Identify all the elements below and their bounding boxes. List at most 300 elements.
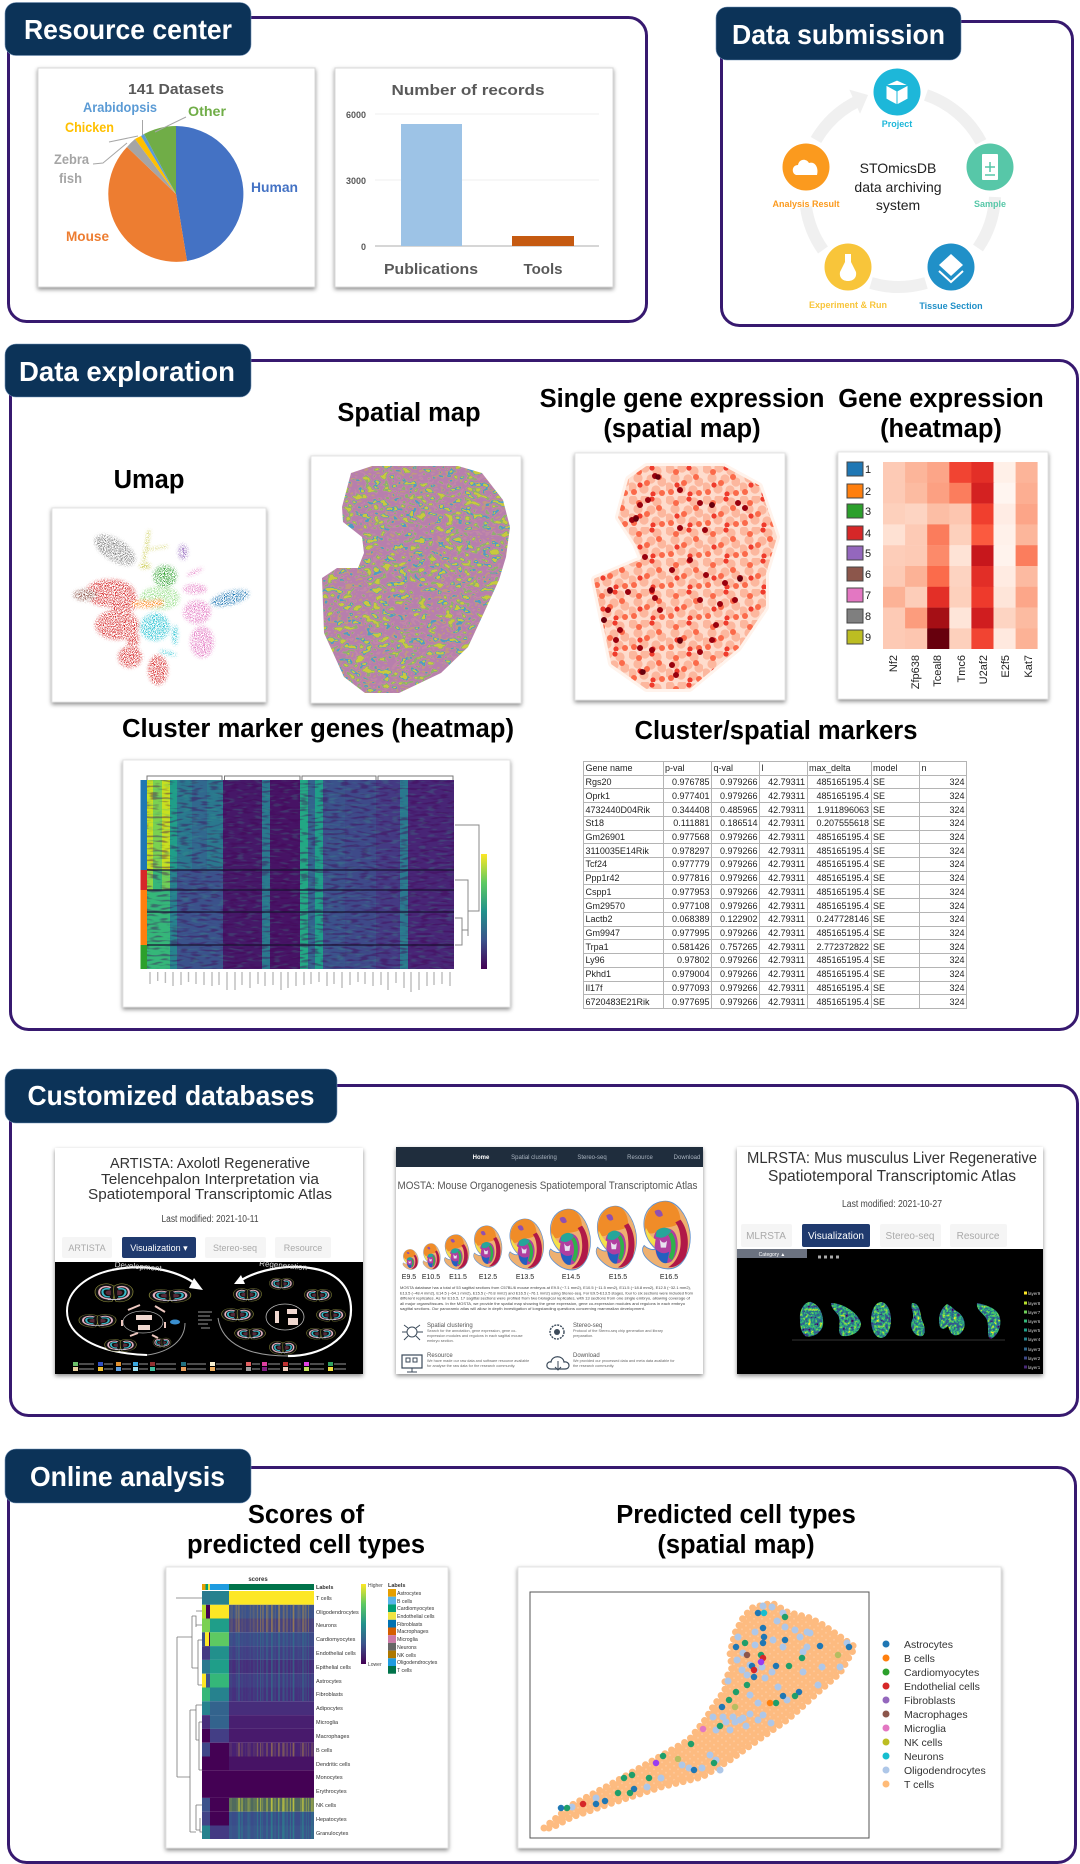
table: cluster spatial markers: SE xyxy=(873,818,885,828)
table: cluster spatial markers: 0.186514 xyxy=(720,818,758,828)
heading: customized databases: Customized databases xyxy=(28,1080,314,1111)
table: cluster spatial markers: 0.979266 xyxy=(720,777,758,787)
label legend: T cells xyxy=(397,1668,412,1674)
table: cluster spatial markers: 324 xyxy=(949,859,964,869)
table: cluster spatial markers: 324 xyxy=(949,914,964,924)
title: scores of predicted cell types: predicted cell types xyxy=(187,1531,425,1559)
umap card xyxy=(52,508,266,702)
table: cluster spatial markers: 0.581426 xyxy=(672,942,710,952)
table: cluster spatial markers: Oprk1 xyxy=(586,791,610,801)
card: ARTISTA xyxy=(55,1148,363,1374)
table: cluster spatial markers: SE xyxy=(873,859,885,869)
icon: experiment and run xyxy=(824,244,872,290)
cell type legend: T cells xyxy=(904,1779,934,1791)
single gene expression card xyxy=(575,453,785,700)
icon: analysis result xyxy=(782,144,830,190)
table: cluster spatial markers: max_delta xyxy=(809,763,851,773)
table: cluster spatial markers: 42.79311 xyxy=(768,969,805,979)
table: cluster spatial markers: SE xyxy=(873,942,885,952)
colour scale xyxy=(361,1583,383,1668)
feature: resource: We have made our raw data and software resource available xyxy=(427,1359,529,1363)
colorbar xyxy=(481,854,487,969)
table: cluster spatial markers: 0.122902 xyxy=(720,914,758,924)
table: cluster spatial markers: SE xyxy=(873,777,885,787)
bar chart card: number of records: Number of records xyxy=(392,82,544,99)
panel: resource center xyxy=(5,2,646,322)
table: cluster spatial markers: 0.979266 xyxy=(720,928,758,938)
pie chart card: 141 datasets xyxy=(38,68,315,287)
table: cluster spatial markers: SE xyxy=(873,955,885,965)
table: cluster spatial markers: 324 xyxy=(949,873,964,883)
table: cluster spatial markers: 42.79311 xyxy=(768,887,805,897)
table: cluster spatial markers: 324 xyxy=(949,942,964,952)
table: cluster spatial markers: 0.344408 xyxy=(672,805,710,815)
pie chart card: 141 datasets: Arabidopsis xyxy=(83,99,157,115)
panel: customized databases xyxy=(5,1069,1078,1416)
table: cluster spatial markers: 42.79311 xyxy=(768,818,805,828)
title: gene expression heatmap xyxy=(838,385,1044,443)
table: cluster spatial markers: 485165195.4 xyxy=(816,887,869,897)
row labels: Erythrocytes xyxy=(316,1789,347,1795)
row labels: NK cells xyxy=(316,1803,336,1809)
nav bar: Stereo-seq xyxy=(577,1155,607,1161)
heading: customized databases xyxy=(5,1069,337,1123)
embryo series: E13.5 xyxy=(516,1274,534,1281)
cell type legend: Fibroblasts xyxy=(904,1695,955,1707)
tabs: Visualization ▾ xyxy=(130,1243,188,1253)
table: cluster spatial markers: 0.979266 xyxy=(720,955,758,965)
table: cluster spatial markers: 6720483E21Rik xyxy=(586,997,650,1007)
table: cluster spatial markers: 42.79311 xyxy=(768,832,805,842)
feature: spatial clustering: expression modules and regulons in each sagittal mouse xyxy=(427,1334,523,1338)
title: predicted cell types spatial map: (spatial map) xyxy=(657,1531,815,1559)
table: cluster spatial markers: 485165195.4 xyxy=(816,846,869,856)
gene labels: Nf2 xyxy=(888,655,900,672)
feature: spatial clustering: Search for the annotation, gene expression, gene co- xyxy=(427,1329,517,1333)
table: cluster spatial markers: 324 xyxy=(949,928,964,938)
table: cluster spatial markers: 0.977695 xyxy=(672,997,710,1007)
row labels: Fibroblasts xyxy=(316,1692,343,1698)
embryo series: E11.5 xyxy=(449,1274,467,1281)
tabs: MLRSTA xyxy=(746,1231,786,1242)
table: cluster spatial markers: 0.111881 xyxy=(673,818,710,828)
title: scores of predicted cell types: Scores of xyxy=(248,1501,365,1529)
table: cluster spatial markers: 42.79311 xyxy=(768,777,805,787)
table: cluster spatial markers: Gm29570 xyxy=(586,901,625,911)
card: MOSTA xyxy=(396,1147,703,1374)
table: cluster spatial markers: SE xyxy=(873,901,885,911)
cycle labels xyxy=(772,119,1006,311)
table: cluster spatial markers: 324 xyxy=(949,983,964,993)
table: cluster spatial markers: SE xyxy=(873,983,885,993)
bar chart card: number of records: Tools xyxy=(524,261,562,278)
table: cluster spatial markers: 0.485965 xyxy=(720,805,758,815)
feature: stereo-seq: preparation. xyxy=(573,1334,593,1338)
heading: resource center xyxy=(5,2,251,56)
table: cluster spatial markers: 0.207555618 xyxy=(816,818,869,828)
row labels: Labels xyxy=(316,1585,333,1591)
table: cluster spatial markers: 2.772372822 xyxy=(816,942,869,952)
spatial layers viewer xyxy=(737,1249,1043,1374)
table: cluster spatial markers: 0.068389 xyxy=(672,914,710,924)
layer legend: layer7 xyxy=(1028,1310,1041,1315)
card: ARTISTA: ARTISTA: Axolotl Regenerative xyxy=(110,1155,310,1172)
description: all major organs/tissues. In the MOSTA, we provide the spatial map showing the gene expression, gene co-expression modules and regulons in each embryo xyxy=(400,1302,685,1306)
icon: project xyxy=(874,68,920,116)
center label: STOmicsDB xyxy=(860,160,936,176)
cardiomyocyte spots xyxy=(567,1617,802,1808)
nav bar: Home xyxy=(473,1155,490,1161)
dendrogram xyxy=(176,1598,202,1832)
table: cluster spatial markers: 0.979266 xyxy=(720,873,758,883)
feature: spatial clustering: embryo section. xyxy=(427,1339,454,1343)
layer legend: layer6 xyxy=(1028,1319,1041,1324)
bar chart card: number of records xyxy=(335,68,613,287)
table: cluster spatial markers: 3110035E14Rik xyxy=(586,846,649,856)
table: cluster spatial markers: model xyxy=(873,763,898,773)
title: scores of predicted cell types xyxy=(187,1501,425,1559)
table: cluster spatial markers: 324 xyxy=(949,846,964,856)
bar chart card: number of records: 0 xyxy=(361,242,366,252)
layer legend: layer1 xyxy=(1028,1365,1041,1370)
label legend: Macrophages xyxy=(397,1629,429,1635)
bar chart card: number of records: Publications xyxy=(384,261,478,278)
tabs xyxy=(741,1224,1007,1247)
cluster legend xyxy=(847,462,863,644)
development and regeneration figure: Development xyxy=(114,1260,163,1273)
tabs: Visualization xyxy=(808,1231,864,1242)
table: cluster spatial markers: 324 xyxy=(949,832,964,842)
embryo series: E16.5 xyxy=(660,1274,678,1281)
table: cluster spatial markers: 0.979266 xyxy=(720,832,758,842)
title: cluster marker genes: Cluster marker genes (heatmap) xyxy=(122,715,514,743)
embryo series: E15.5 xyxy=(609,1274,627,1281)
scores heatmap card xyxy=(166,1567,448,1848)
table: cluster spatial markers: 324 xyxy=(949,997,964,1007)
cell type legend: B cells xyxy=(904,1653,935,1665)
table: cluster spatial markers: Ly96 xyxy=(586,955,605,965)
gene labels: Tceal8 xyxy=(932,655,944,687)
feature: resource: for analyse the raw data for the research community. xyxy=(427,1364,515,1368)
table: cluster spatial markers: l xyxy=(762,763,764,773)
table: cluster spatial markers: 485165195.4 xyxy=(816,832,869,842)
table: cluster spatial markers: 42.79311 xyxy=(768,873,805,883)
row labels: Astrocytes xyxy=(316,1679,342,1685)
feature: spatial clustering xyxy=(402,1323,523,1343)
table: cluster spatial markers: 0.757265 xyxy=(720,942,758,952)
development and regeneration figure xyxy=(55,1259,363,1374)
card: MLRSTA: Spatiotemporal Transcriptomic Atlas xyxy=(768,1168,1016,1185)
label bar xyxy=(202,1584,314,1590)
title: umap: Umap xyxy=(114,466,184,494)
table: cluster spatial markers: Rgs20 xyxy=(586,777,612,787)
astrocyte spots xyxy=(561,1613,849,1808)
cycle ring arrows xyxy=(806,92,995,287)
table: cluster spatial markers: 42.79311 xyxy=(768,914,805,924)
tissue xyxy=(544,1603,855,1828)
feature: spatial clustering: Spatial clustering xyxy=(427,1323,473,1329)
title: gene expression heatmap: (heatmap) xyxy=(880,415,1002,443)
nav bar xyxy=(396,1147,703,1167)
row labels: Endothelial cells xyxy=(316,1651,356,1657)
pie chart card: 141 datasets: Mouse xyxy=(66,228,109,244)
nav bar: Spatial clustering xyxy=(511,1155,557,1161)
table: cluster spatial markers: 485165195.4 xyxy=(816,997,869,1007)
layer legend xyxy=(1028,1291,1041,1370)
table: cluster spatial markers: 324 xyxy=(949,777,964,787)
table: cluster spatial markers xyxy=(583,761,967,1009)
row labels: Oligodendrocytes xyxy=(316,1610,359,1616)
table: cluster spatial markers: 0.978297 xyxy=(672,846,710,856)
top brackets xyxy=(147,776,453,780)
cell type legend: Neurons xyxy=(904,1751,944,1763)
bar chart card: number of records: 6000 xyxy=(346,110,366,120)
panel: data exploration xyxy=(5,344,1078,1030)
table: cluster spatial markers: 0.979266 xyxy=(720,983,758,993)
gene expression heatmap card: 8 xyxy=(865,611,871,623)
feature: stereo-seq xyxy=(550,1323,663,1339)
row labels: Hepatocytes xyxy=(316,1817,347,1823)
table: cluster spatial markers: SE xyxy=(873,997,885,1007)
table: cluster spatial markers: Gm9947 xyxy=(586,928,620,938)
table: cluster spatial markers: 0.977401 xyxy=(672,791,710,801)
gene expression heatmap card: 1 xyxy=(865,464,871,476)
cell type legend: Oligodendrocytes xyxy=(904,1765,986,1777)
label legend xyxy=(388,1583,438,1674)
row labels: Neurons xyxy=(316,1623,337,1629)
heatmap cells xyxy=(883,462,1038,649)
cycle labels: Sample xyxy=(974,199,1006,209)
gene expression heatmap card: 2 xyxy=(865,486,871,498)
table: cluster spatial markers: 324 xyxy=(949,901,964,911)
table: cluster spatial markers: St18 xyxy=(586,818,604,828)
bar chart card: number of records: 3000 xyxy=(346,176,366,186)
feature: stereo-seq: Stereo-seq xyxy=(573,1323,602,1329)
nav bar: Download xyxy=(674,1155,700,1161)
table: cluster spatial markers: 0.977995 xyxy=(672,928,710,938)
development and regeneration figure: Regeneration xyxy=(259,1259,308,1272)
gene labels: E2f5 xyxy=(1000,655,1012,678)
table: cluster spatial markers: 1.911896063 xyxy=(817,805,869,815)
table: cluster spatial markers: Il17f xyxy=(586,983,603,993)
tabs: Resource xyxy=(957,1231,1000,1242)
pie chart card: 141 datasets: 141 Datasets xyxy=(128,81,224,98)
layer legend: layer3 xyxy=(1028,1347,1041,1352)
nav bar: Resource xyxy=(627,1155,653,1161)
table: cluster spatial markers: 485165195.4 xyxy=(816,901,869,911)
embryo series: E10.5 xyxy=(422,1274,440,1281)
predicted cell types spatial map card xyxy=(518,1567,1001,1848)
label legend: Astrocytes xyxy=(397,1591,422,1597)
table: cluster spatial markers: 485165195.4 xyxy=(816,983,869,993)
table: cluster spatial markers: 324 xyxy=(949,955,964,965)
card: ARTISTA: Telencehpalon Interpretation via xyxy=(101,1171,320,1188)
card: ARTISTA: Last modified: 2021-10-11 xyxy=(162,1214,259,1225)
oligodendrocyte spots xyxy=(572,1606,847,1807)
gene labels: Tmc6 xyxy=(956,655,968,682)
table: cluster spatial markers: p-val xyxy=(665,763,685,773)
side cluster bar xyxy=(140,780,147,969)
gene expression heatmap card: 4 xyxy=(865,528,871,540)
spatial layers viewer: Category ▲ xyxy=(759,1252,785,1258)
tabs: Stereo-seq xyxy=(213,1243,257,1253)
row labels: Adipocytes xyxy=(316,1706,343,1712)
table: cluster spatial markers: SE xyxy=(873,928,885,938)
title: predicted cell types spatial map xyxy=(616,1501,856,1559)
table: cluster spatial markers: 4732440D04Rik xyxy=(586,805,650,815)
heading: data exploration: Data exploration xyxy=(19,356,235,387)
label legend: Fibroblasts xyxy=(397,1622,423,1628)
table: cluster spatial markers: n xyxy=(922,763,927,773)
cycle labels: Experiment & Run xyxy=(809,300,887,310)
gene expression heatmap card: 3 xyxy=(865,506,871,518)
label legend: NK cells xyxy=(397,1653,416,1659)
row labels: B cells xyxy=(316,1748,332,1754)
icon: tissue section xyxy=(928,244,974,290)
pie chart card: 141 datasets: Zebra xyxy=(54,151,89,167)
colour scale: Lower xyxy=(368,1662,382,1668)
row labels: Monocytes xyxy=(316,1775,343,1781)
cell type legend: NK cells xyxy=(904,1737,943,1749)
table: cluster spatial markers: 42.79311 xyxy=(768,859,805,869)
card: MLRSTA: MLRSTA: Mus musculus Liver Regenerative xyxy=(747,1150,1037,1167)
row labels: Macrophages xyxy=(316,1734,350,1740)
table: cluster spatial markers: SE xyxy=(873,969,885,979)
panel: data submission xyxy=(716,7,1072,326)
table: cluster spatial markers: SE xyxy=(873,887,885,897)
tabs: Stereo-seq xyxy=(886,1231,934,1242)
layer legend: layer9 xyxy=(1028,1291,1041,1296)
label legend: B cells xyxy=(397,1599,413,1605)
embryo series: E12.5 xyxy=(479,1274,497,1281)
gene labels xyxy=(888,655,1035,689)
row labels: Granulocytes xyxy=(316,1831,349,1837)
table: cluster spatial markers: 0.979266 xyxy=(720,791,758,801)
center label xyxy=(854,160,942,213)
row labels xyxy=(316,1585,359,1837)
layer legend: layer4 xyxy=(1028,1337,1041,1342)
label legend: Oligodendrocytes xyxy=(397,1660,438,1666)
gene expression heatmap card: 9 xyxy=(865,632,871,644)
cell type legend: Microglia xyxy=(904,1723,946,1735)
label legend: Endothelial cells xyxy=(397,1614,435,1620)
table: cluster spatial markers: 324 xyxy=(949,969,964,979)
gene expression heatmap card: 7 xyxy=(865,590,871,602)
label legend: Neurons xyxy=(397,1645,417,1651)
feature: download: We provided our processed data and meta data available for xyxy=(573,1359,675,1363)
column labels xyxy=(150,972,450,992)
table: cluster spatial markers: Tcf24 xyxy=(586,859,607,869)
row labels: Dendritic cells xyxy=(316,1762,350,1768)
table: cluster spatial markers: 42.79311 xyxy=(768,997,805,1007)
gene expression heatmap card: 6 xyxy=(865,569,871,581)
table: cluster spatial markers: 0.247728146 xyxy=(816,914,869,924)
table: cluster spatial markers: 485165195.4 xyxy=(816,777,869,787)
table: cluster spatial markers: 0.977108 xyxy=(672,901,710,911)
description: sagittal sections. Our panoramic atlas will allow in depth investigation of longstanding questions concerning mammalian development. xyxy=(400,1307,645,1311)
viridis heatmap xyxy=(147,780,454,969)
table: cluster spatial markers: Lactb2 xyxy=(586,914,613,924)
rare cell type spots xyxy=(583,1613,838,1804)
table: cluster spatial markers: SE xyxy=(873,914,885,924)
table: cluster spatial markers: 0.979266 xyxy=(720,887,758,897)
panel: online analysis xyxy=(5,1449,1076,1862)
figure legend xyxy=(73,1362,346,1371)
table: cluster spatial markers: 0.97802 xyxy=(677,955,710,965)
feature: resource: Resource xyxy=(427,1353,453,1359)
table: cluster spatial markers: 0.979266 xyxy=(720,901,758,911)
table: cluster spatial markers: q-val xyxy=(714,763,733,773)
cycle labels: Tissue Section xyxy=(919,301,983,311)
gene labels: Zfp638 xyxy=(910,655,922,689)
row labels: T cells xyxy=(316,1596,332,1602)
card: MOSTA: MOSTA: Mouse Organogenesis Spatiotemporal Transcriptomic Atlas xyxy=(398,1180,698,1192)
card: MLRSTA xyxy=(737,1147,1043,1374)
title: single gene expression xyxy=(540,385,824,443)
cell type legend: Endothelial cells xyxy=(904,1681,980,1693)
table: cluster spatial markers: 42.79311 xyxy=(768,901,805,911)
tabs: ARTISTA xyxy=(68,1243,106,1253)
gene expression heatmap card: 5 xyxy=(865,548,871,560)
label legend: Microglia xyxy=(397,1637,418,1643)
cell type legend: Macrophages xyxy=(904,1709,968,1721)
table: cluster spatial markers: 485165195.4 xyxy=(816,928,869,938)
title: spatial map: Spatial map xyxy=(337,399,481,427)
table: cluster spatial markers: Gm26901 xyxy=(586,832,625,842)
layer legend: layer5 xyxy=(1028,1328,1041,1333)
table: cluster spatial markers: Cspp1 xyxy=(586,887,612,897)
table: cluster spatial markers: 0.979266 xyxy=(720,859,758,869)
table: cluster spatial markers: 42.79311 xyxy=(768,955,805,965)
description xyxy=(400,1286,693,1311)
table: cluster spatial markers: 0.977953 xyxy=(672,887,710,897)
card: MLRSTA: Last modified: 2021-10-27 xyxy=(842,1199,942,1210)
gene expression heatmap card xyxy=(838,452,1048,699)
table: cluster spatial markers: 0.979266 xyxy=(720,969,758,979)
table: cluster spatial markers: Trpa1 xyxy=(586,942,609,952)
feature: download: Download xyxy=(573,1353,600,1359)
title: single gene expression: Single gene expression xyxy=(540,385,824,413)
description: E13.5 (~48.4 mm2), E14.5 (~64.1 mm2), E15.5 (~70.8 mm2) and E16.5 (~76.1 mm2) using Stereo-seq. For E9.5-E13.5 stages, four to six sections were included from xyxy=(400,1292,693,1296)
table: cluster spatial markers: 42.79311 xyxy=(768,791,805,801)
center label: system xyxy=(876,197,920,213)
table: cluster spatial markers: 485165195.4 xyxy=(816,791,869,801)
table: cluster spatial markers: 324 xyxy=(949,791,964,801)
title: cluster spatial markers: Cluster/spatial markers xyxy=(634,717,918,745)
table: cluster spatial markers: 485165195.4 xyxy=(816,859,869,869)
table: cluster spatial markers: SE xyxy=(873,873,885,883)
embryo series: E14.5 xyxy=(562,1274,580,1281)
feature: stereo-seq: Protocol of the Stereo-seq chip generation and library xyxy=(573,1329,663,1333)
label legend: Labels xyxy=(388,1583,405,1589)
table: cluster spatial markers: 42.79311 xyxy=(768,942,805,952)
pie chart card: 141 datasets: Human xyxy=(251,179,298,195)
colour scale: Higher xyxy=(368,1583,383,1589)
label legend: Cardiomyocytes xyxy=(397,1606,435,1612)
table: cluster spatial markers: 42.79311 xyxy=(768,983,805,993)
feature: resource xyxy=(402,1353,529,1372)
table: cluster spatial markers: 324 xyxy=(949,805,964,815)
table: cluster spatial markers: 485165195.4 xyxy=(816,969,869,979)
heading: online analysis xyxy=(5,1449,251,1503)
gene labels: Kat7 xyxy=(1023,655,1035,678)
spatial map card xyxy=(311,456,521,703)
icon: sample xyxy=(966,144,1014,190)
embryo series: E9.5 xyxy=(402,1274,416,1281)
table: cluster spatial markers: SE xyxy=(873,805,885,815)
pie chart card: 141 datasets: Chicken xyxy=(65,119,114,135)
cycle labels: Analysis Result xyxy=(772,199,840,209)
